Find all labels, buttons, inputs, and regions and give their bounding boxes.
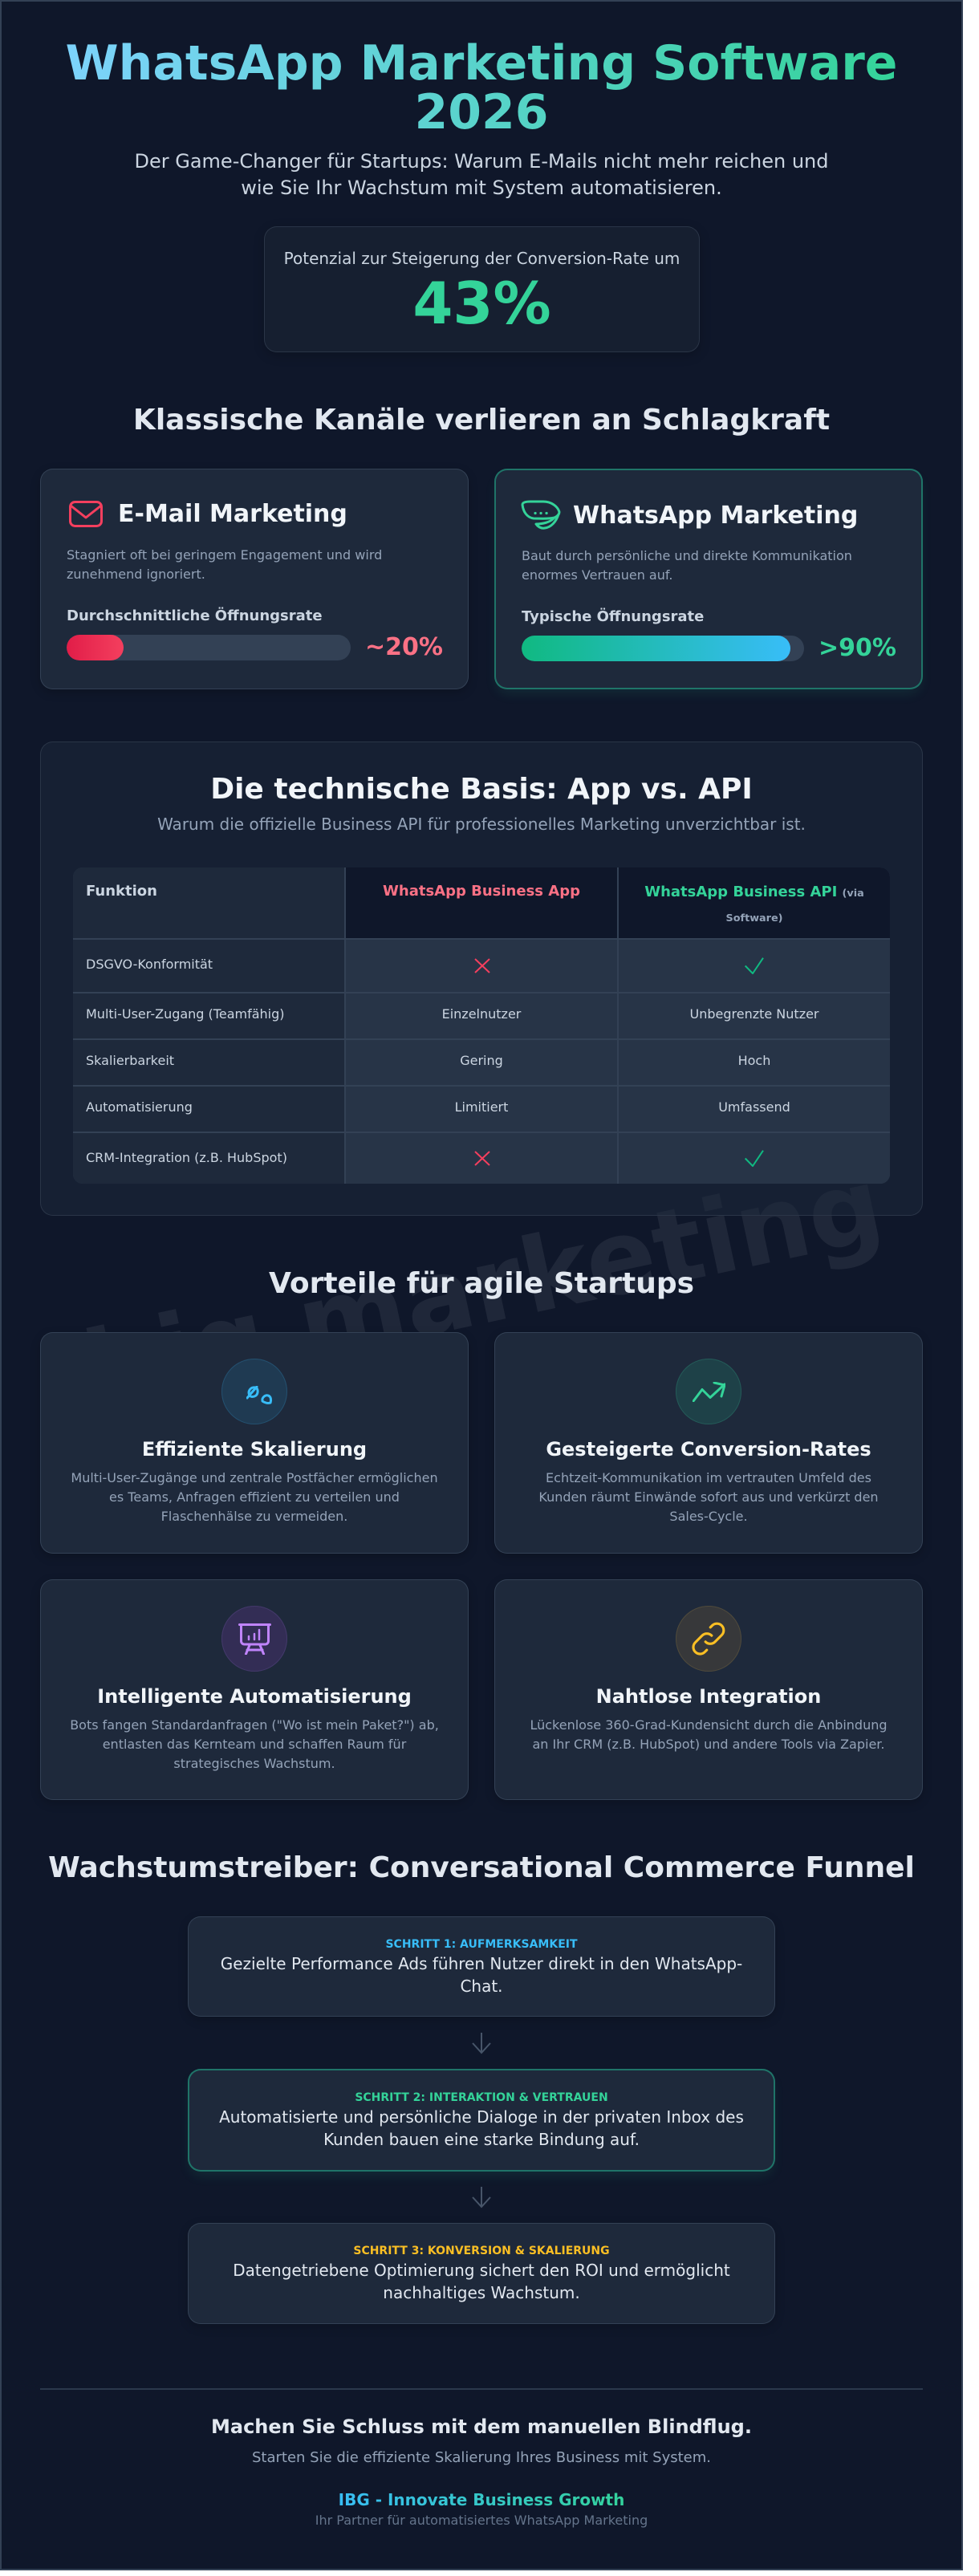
whatsapp rate value: >90% (819, 634, 896, 662)
step 3 text (233, 2261, 730, 2302)
comparison subtitle: Warum die offizielle Business API für professionelles Marketing unverzichtbar ist. (157, 815, 806, 834)
benefit text: Flaschenhälse zu vermeiden. (161, 1509, 347, 1524)
step 1 text: Chat. (460, 1977, 503, 1996)
title: WhatsApp Marketing Software (66, 35, 897, 91)
e-mail rate label: Durchschnittliche Öffnungsrate (67, 607, 323, 624)
step 2 text (219, 2107, 744, 2149)
background watermark text: big marketing (75, 1145, 892, 1431)
e-mail bar fill (67, 635, 124, 660)
e-mail description: zunehmend ignoriert. (67, 567, 205, 582)
row: scalability (73, 1040, 890, 1085)
brand tagline: Ihr Partner für automatisiertes WhatsApp Marketing (315, 2513, 648, 2528)
panel: whatsapp marketing (494, 469, 923, 689)
icon: cross (474, 958, 490, 973)
icon: check (745, 957, 764, 974)
table header (73, 867, 890, 938)
whatsapp rate bar (522, 636, 804, 661)
panel: app vs api comparison (40, 742, 923, 1216)
benefit title: Intelligente Automatisierung (97, 1685, 412, 1708)
header: business app: WhatsApp Business App (383, 883, 580, 900)
panel: intelligent automation (40, 1579, 469, 1800)
benefit text: Sales-Cycle. (669, 1509, 748, 1524)
whatsapp description: enormes Vertrauen auf. (522, 567, 672, 583)
benefit text (538, 1470, 879, 1524)
comparison table (73, 867, 890, 1184)
e-mail description (67, 547, 382, 582)
panel: seamless integration (494, 1579, 923, 1800)
panel: conversion rates (494, 1332, 923, 1554)
row: multi-user: Multi-User-Zugang (Teamfähig) (86, 1006, 284, 1022)
row: CRM integration: CRM-Integration (z.B. HubSpot) (86, 1150, 287, 1165)
step 3 text: nachhaltiges Wachstum. (383, 2283, 580, 2302)
icon: scaling (221, 1359, 287, 1424)
row: automation (73, 1087, 890, 1132)
icon: check (745, 1150, 764, 1167)
brand name: IBG - Innovate Business Growth (339, 2490, 624, 2509)
header: business api: Software) (725, 912, 783, 924)
header: business api: WhatsApp Business API (via (644, 884, 864, 900)
title (64, 39, 899, 137)
e-mail description: Stagniert oft bei geringem Engagement und wird (67, 547, 382, 563)
benefit text (530, 1717, 888, 1752)
e-mail heading: E-Mail Marketing (118, 500, 347, 528)
benefit text: Echtzeit-Kommunikation im vertrauten Umfeld des (546, 1470, 871, 1485)
step 2 label: SCHRITT 2: INTERAKTION & VERTRAUEN (355, 2091, 608, 2104)
header: business app (346, 867, 617, 938)
icon: link (676, 1606, 741, 1672)
row: scalability: Skalierbarkeit (86, 1053, 174, 1068)
subtitle: Der Game-Changer für Startups: Warum E-Mails nicht mehr reichen und (135, 150, 828, 173)
benefit text (71, 1470, 438, 1524)
icon: presentation board (221, 1606, 287, 1672)
heading: channels: Klassische Kanäle verlieren an Schlagkraft (133, 404, 830, 437)
benefit text: entlasten das Kernteam und schaffen Raum für (103, 1737, 406, 1752)
panel: conversion stat (264, 226, 700, 352)
funnel step 3 (188, 2223, 775, 2324)
row: DSGVO: DSGVO-Konformität (86, 957, 213, 972)
benefit text (70, 1717, 439, 1771)
benefit title: Gesteigerte Conversion-Rates (546, 1438, 871, 1461)
whatsapp description (522, 548, 852, 583)
footer call to action: Starten Sie die effiziente Skalierung Ihres Business mit System. (252, 2449, 711, 2466)
row: CRM integration (73, 1133, 890, 1184)
step 1 label: SCHRITT 1: AUFMERKSAMKEIT (385, 1938, 578, 1951)
step 1 text: Gezielte Performance Ads führen Nutzer direkt in den WhatsApp- (221, 1954, 742, 1973)
benefit text: Lückenlose 360-Grad-Kundensicht durch die Anbindung (530, 1717, 888, 1733)
funnel step 1 (188, 1916, 775, 2017)
row: scalability: Hoch (738, 1053, 770, 1068)
row: scalability: Gering (460, 1053, 503, 1068)
row: multi-user (73, 993, 890, 1038)
benefit title: Effiziente Skalierung (142, 1438, 367, 1461)
arrow: step 2 to 3 (472, 2187, 491, 2208)
row: multi-user: Einzelnutzer (442, 1006, 521, 1022)
header: business api (619, 867, 890, 938)
header: function: Funktion (86, 883, 157, 900)
heading: benefits: Vorteile für agile Startups (269, 1267, 694, 1300)
step 1 text (221, 1954, 742, 1996)
icon: envelope (69, 501, 103, 527)
step 3 text: Datengetriebene Optimierung sichert den ROI und ermöglicht (233, 2261, 730, 2280)
row: DSGVO (73, 940, 890, 992)
panel: efficient scaling (40, 1332, 469, 1554)
title: 2026 (414, 84, 549, 140)
arrow: step 1 to 2 (472, 2033, 491, 2054)
benefit title: Nahtlose Integration (596, 1685, 821, 1708)
benefit text: an Ihr CRM (z.B. HubSpot) und andere Tools via Zapier. (533, 1737, 884, 1752)
row: multi-user: Unbegrenzte Nutzer (689, 1006, 819, 1022)
step 2 text: Kunden bauen eine starke Bindung auf. (323, 2130, 640, 2149)
icon: trending up (676, 1359, 741, 1424)
stat value: 43% (412, 270, 551, 337)
row: automation: Automatisierung (86, 1099, 193, 1115)
benefit text: Multi-User-Zugänge und zentrale Postfächer ermöglichen (71, 1470, 438, 1485)
subtitle (135, 150, 828, 199)
benefit text: strategisches Wachstum. (173, 1756, 335, 1771)
whatsapp heading: WhatsApp Marketing (573, 502, 858, 530)
icon: chat bubble (522, 501, 560, 530)
panel: e-mail marketing (40, 469, 469, 689)
benefit text: es Teams, Anfragen effizient zu verteilen und (109, 1489, 400, 1505)
icon: cross (474, 1151, 490, 1166)
funnel step 2 (188, 2069, 775, 2172)
step 3 label: SCHRITT 3: KONVERSION & SKALIERUNG (353, 2245, 610, 2257)
whatsapp bar fill (522, 636, 790, 661)
stat label: Potenzial zur Steigerung der Conversion-Rate um (284, 249, 680, 268)
whatsapp description: Baut durch persönliche und direkte Kommunikation (522, 548, 852, 563)
e-mail rate bar (67, 635, 351, 660)
benefit text: Bots fangen Standardanfragen ("Wo ist mein Paket?") ab, (70, 1717, 439, 1733)
row: automation: Umfassend (718, 1099, 790, 1115)
e-mail rate value: ~20% (365, 633, 443, 661)
subtitle: wie Sie Ihr Wachstum mit System automatisieren. (241, 177, 722, 199)
header: function (73, 867, 344, 938)
footer headline: Machen Sie Schluss mit dem manuellen Blindflug. (211, 2416, 752, 2438)
benefit text: Kunden räumt Einwände sofort aus und verkürzt den (538, 1489, 879, 1505)
step 2 text: Automatisierte und persönliche Dialoge in der privaten Inbox des (219, 2107, 744, 2127)
comparison heading: Die technische Basis: App vs. API (210, 773, 753, 806)
whatsapp rate label: Typische Öffnungsrate (522, 608, 704, 625)
heading: funnel: Wachstumstreiber: Conversational Commerce Funnel (48, 1851, 915, 1884)
row: automation: Limitiert (455, 1099, 508, 1115)
